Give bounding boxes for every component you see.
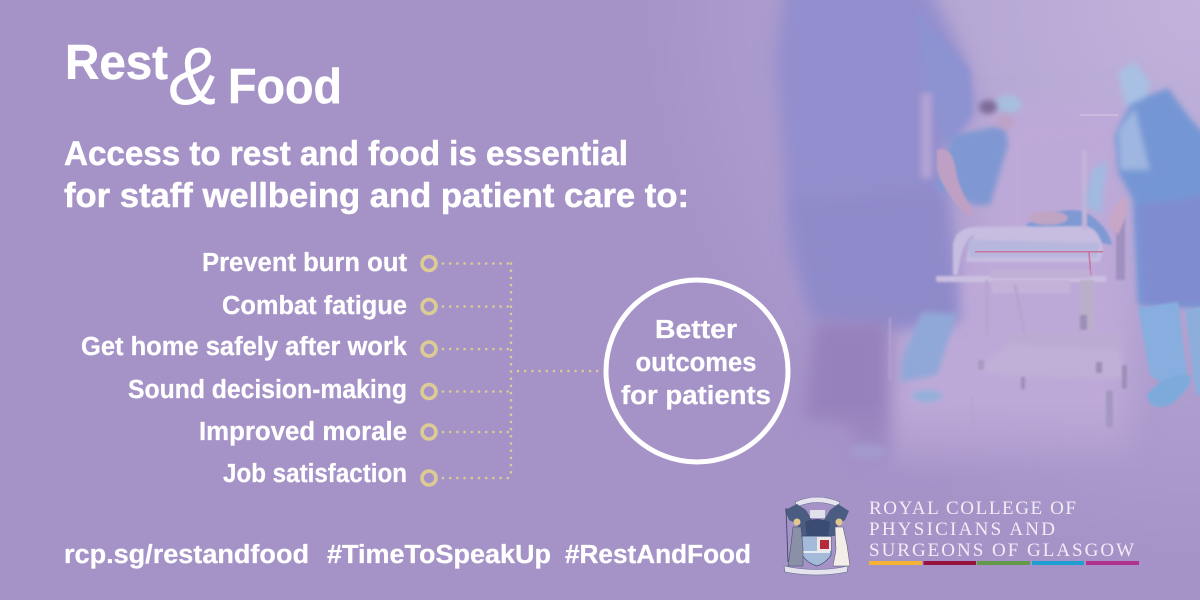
- heading: Access to rest and food is essential: [64, 135, 628, 173]
- photo: hospital corridor with staff rushing a stretcher: [772, 0, 1200, 470]
- benefits list: Job satisfaction: [223, 460, 407, 488]
- footer links: rcp.sg/restandfood: [64, 541, 309, 569]
- shield: [802, 536, 831, 566]
- bottom motto scroll: [784, 566, 848, 575]
- footer links: #TimeToSpeakUp: [327, 541, 551, 569]
- supporters' wings: [785, 504, 849, 536]
- outcome circle: Better: [655, 316, 737, 344]
- benefits list: Improved morale: [199, 418, 407, 446]
- stretcher with patient: [936, 210, 1127, 428]
- logo wordmark: ROYAL COLLEGE OF: [869, 498, 1076, 519]
- ring markers: [422, 256, 436, 485]
- benefits list: Sound decision-making: [128, 376, 407, 404]
- logo wordmark: [869, 498, 1134, 561]
- title: Rest: [65, 36, 168, 90]
- corridor glow: [890, 140, 1130, 456]
- logo crest: [784, 497, 850, 575]
- footer links: #RestAndFood: [565, 541, 751, 569]
- heading: for staff wellbeing and patient care to:: [64, 177, 689, 215]
- dotted connectors: [443, 264, 601, 478]
- footer links: [64, 541, 751, 569]
- left supporter: [788, 527, 803, 566]
- benefits list: Prevent burn out: [202, 249, 408, 277]
- right supporter: [833, 527, 850, 566]
- top motto scroll: [795, 497, 840, 507]
- benefits list: [81, 249, 408, 488]
- blurred foreground figure: [772, 0, 975, 465]
- benefits list: Get home safely after work: [81, 333, 408, 361]
- logo wordmark: PHYSICIANS AND: [869, 519, 1055, 540]
- outcome circle: outcomes: [636, 349, 756, 377]
- title: &: [169, 31, 219, 122]
- heading: [64, 135, 689, 215]
- IV stand: [1080, 115, 1125, 280]
- title: Food: [228, 60, 342, 114]
- runner on the right: [1108, 62, 1200, 407]
- outcome circle: [606, 280, 788, 462]
- outcome circle: for patients: [621, 382, 771, 410]
- title: [65, 31, 342, 122]
- logo wordmark: SURGEONS OF GLASGOW: [869, 540, 1134, 561]
- benefits list: Combat fatigue: [222, 292, 407, 320]
- logo colour bar: [869, 561, 1139, 565]
- nurse behind the stretcher: [900, 95, 1022, 402]
